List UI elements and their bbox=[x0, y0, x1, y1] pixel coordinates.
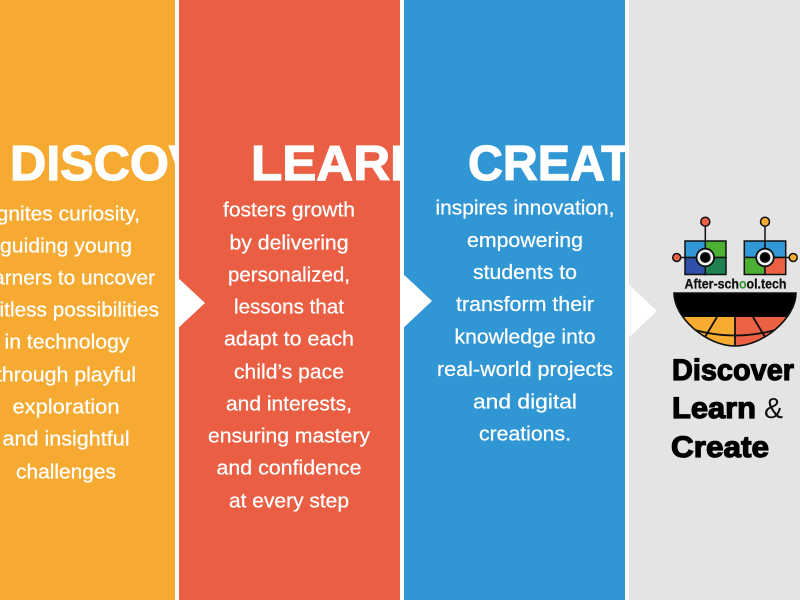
heading: create: CREATE bbox=[468, 137, 663, 191]
panel: brand bbox=[629, 0, 800, 600]
panel: learn bbox=[179, 0, 400, 600]
tagline: Discover bbox=[672, 354, 794, 387]
text: learn description: and confidence bbox=[216, 456, 362, 480]
heading: learn: LEARN bbox=[251, 137, 427, 191]
text: create description: and digital bbox=[473, 390, 577, 414]
icon: smile bbox=[674, 294, 796, 346]
text: learn description: personalized, bbox=[228, 264, 350, 286]
logo wordmark: After-school.tech bbox=[684, 276, 786, 292]
logo: after-school.tech bbox=[670, 217, 800, 350]
text: discover description: challenges bbox=[16, 460, 116, 484]
text: create description: students to bbox=[473, 261, 577, 284]
text: create description: creations. bbox=[479, 422, 571, 446]
tagline: Learn bbox=[672, 392, 756, 425]
text: create description: empowering bbox=[467, 229, 583, 252]
text: learn description: adapt to each bbox=[224, 328, 354, 350]
panel: discover bbox=[0, 0, 175, 600]
text: create description: transform their bbox=[456, 293, 594, 316]
panel: create bbox=[404, 0, 625, 600]
text: learn description: fosters growth bbox=[223, 198, 355, 222]
arrow: discover to learn bbox=[175, 275, 205, 331]
text: discover description: in technology bbox=[4, 330, 130, 354]
text: learn description: by delivering bbox=[230, 232, 348, 254]
text: create description: knowledge into bbox=[454, 326, 596, 348]
text: discover description: guiding young bbox=[0, 234, 132, 258]
arrow: create to brand bbox=[625, 281, 657, 341]
tagline bbox=[671, 354, 794, 464]
arrow: learn to create bbox=[400, 271, 432, 331]
text: discover description: exploration bbox=[12, 396, 119, 418]
text: discover description bbox=[0, 202, 159, 484]
text: create description: inspires innovation, bbox=[436, 196, 614, 220]
icon: right robot eye bbox=[744, 217, 797, 274]
text: learn description: at every step bbox=[229, 490, 349, 512]
tagline: Create bbox=[671, 431, 769, 464]
heading: discover: DISCOVER bbox=[10, 137, 272, 191]
tagline: & bbox=[764, 393, 783, 425]
text: discover description: and insightful bbox=[2, 428, 130, 450]
text: create description: real-world projects bbox=[437, 358, 613, 381]
text: learn description: lessons that bbox=[234, 296, 344, 318]
text: learn description: child’s pace bbox=[234, 360, 344, 384]
text: learn description: and interests, bbox=[226, 392, 352, 416]
icon: left robot eye bbox=[673, 217, 726, 274]
text: create description bbox=[436, 196, 614, 446]
text: learn description: ensuring mastery bbox=[208, 424, 371, 448]
text: learn description bbox=[208, 198, 371, 512]
text: discover description: through playful bbox=[0, 364, 136, 386]
